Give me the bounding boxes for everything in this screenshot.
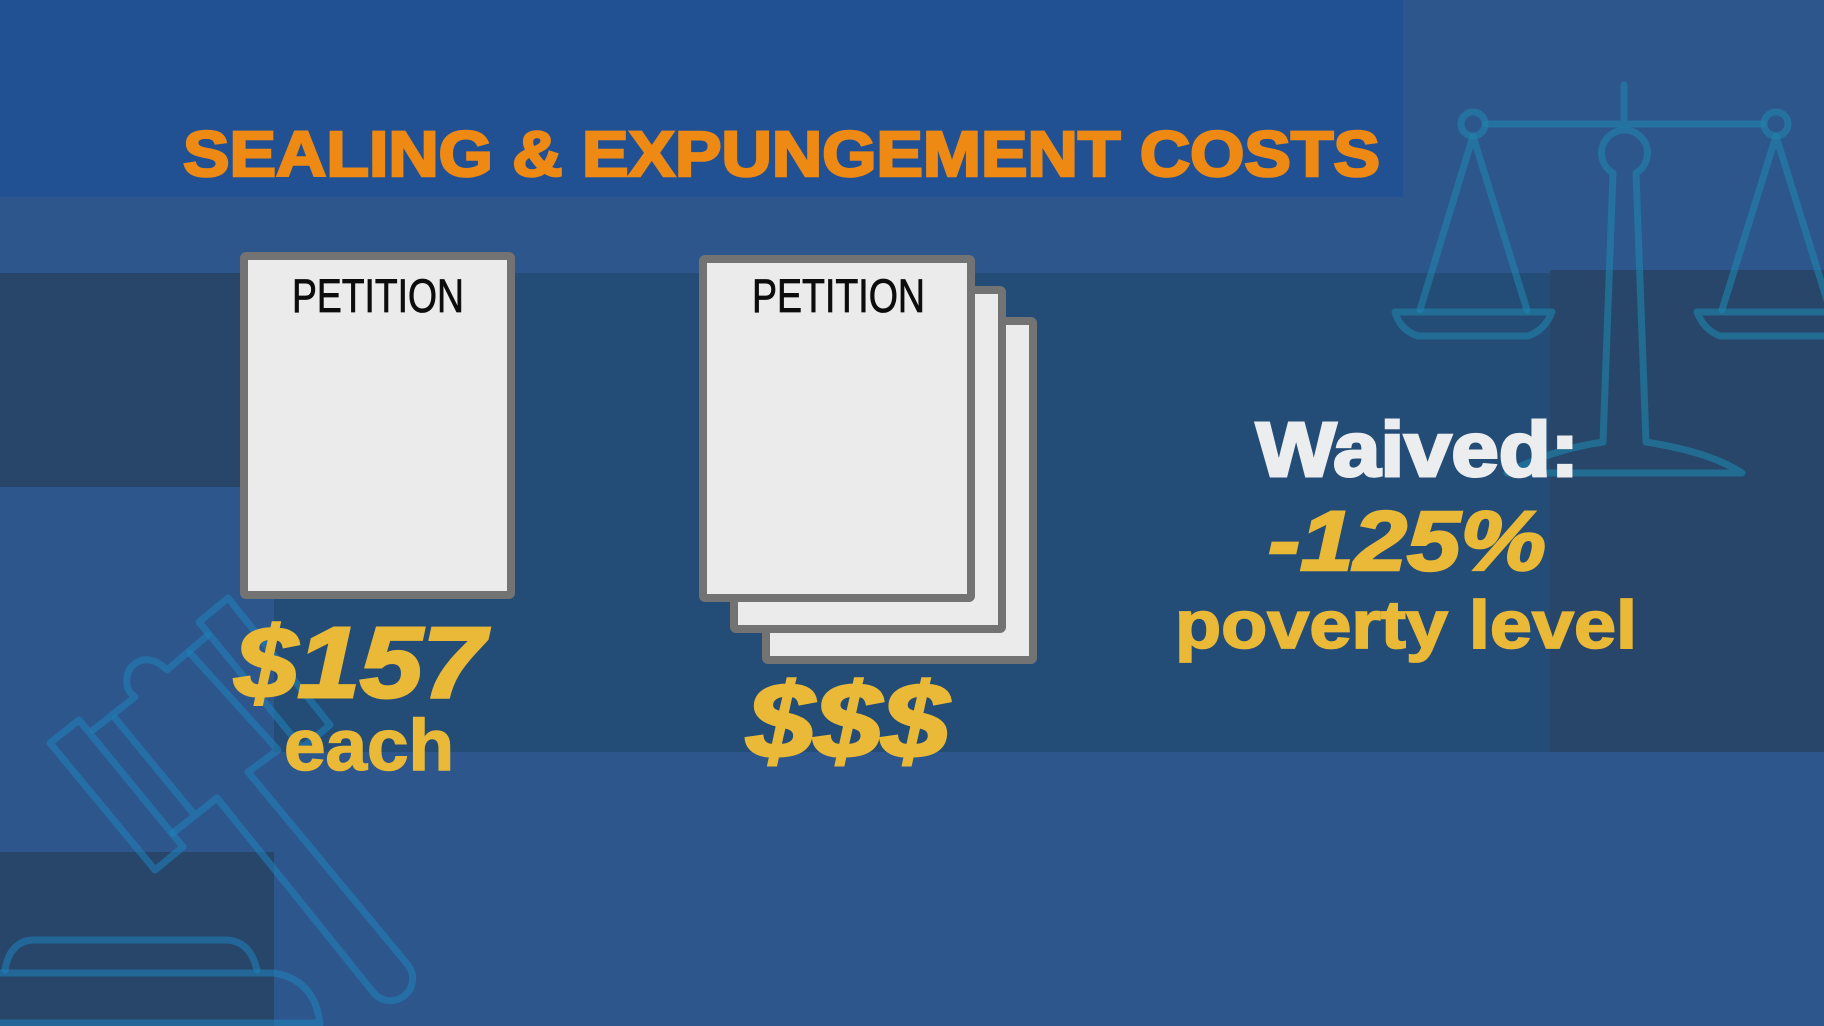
document label: PETITION — [752, 269, 925, 322]
panel: single petition — [244, 256, 511, 595]
middle sheet — [734, 290, 1002, 629]
price caption: each: each — [284, 706, 454, 786]
back sheet — [766, 321, 1033, 660]
heading: SEALING & EXPUNGEMENT COSTS — [183, 118, 1380, 190]
waiver caption: poverty level — [1175, 587, 1637, 663]
waiver heading: Waived: — [1256, 407, 1579, 493]
icon: gavel and sound block — [0, 598, 413, 1024]
document label: PETITION — [292, 269, 464, 322]
price: multiple petitions: $$$ — [746, 662, 950, 780]
waiver threshold: -125% — [1268, 494, 1546, 588]
icon: scales of justice — [1395, 85, 1824, 473]
panel: stack of petitions — [703, 259, 1033, 660]
price: per petition: $157 — [234, 607, 490, 719]
document sheet — [244, 256, 511, 595]
front sheet — [703, 259, 971, 598]
